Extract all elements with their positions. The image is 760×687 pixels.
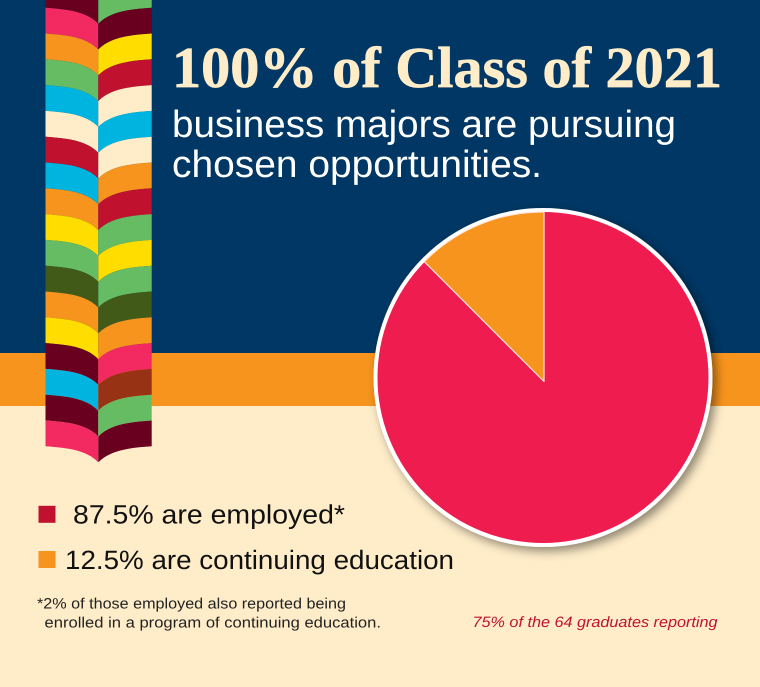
- ribbon: multicolour chevron banner: [46, 0, 152, 462]
- pie chart: 87.5% employed, 12.5% continuing education: [376, 210, 710, 545]
- legend item: employed: 87.5% are employed*: [73, 500, 345, 530]
- subtitle: chosen opportunities.: [172, 144, 542, 186]
- title: 100% of Class of 2021: [172, 35, 722, 100]
- footnote: [37, 596, 381, 632]
- pie slice: 87.5% employed: [376, 210, 710, 545]
- subtitle: [172, 104, 676, 186]
- pie slice: 12.5% continuing education: [424, 212, 544, 382]
- subtitle: business majors are pursuing: [172, 104, 676, 146]
- response rate note: 75% of the 64 graduates reporting: [472, 614, 718, 631]
- footnote: enrolled in a program of continuing education.: [44, 614, 381, 632]
- legend item: continuing education: 12.5% are continuing education: [65, 545, 454, 575]
- legend: [38, 500, 454, 575]
- footnote: *2% of those employed also reported being: [37, 596, 346, 612]
